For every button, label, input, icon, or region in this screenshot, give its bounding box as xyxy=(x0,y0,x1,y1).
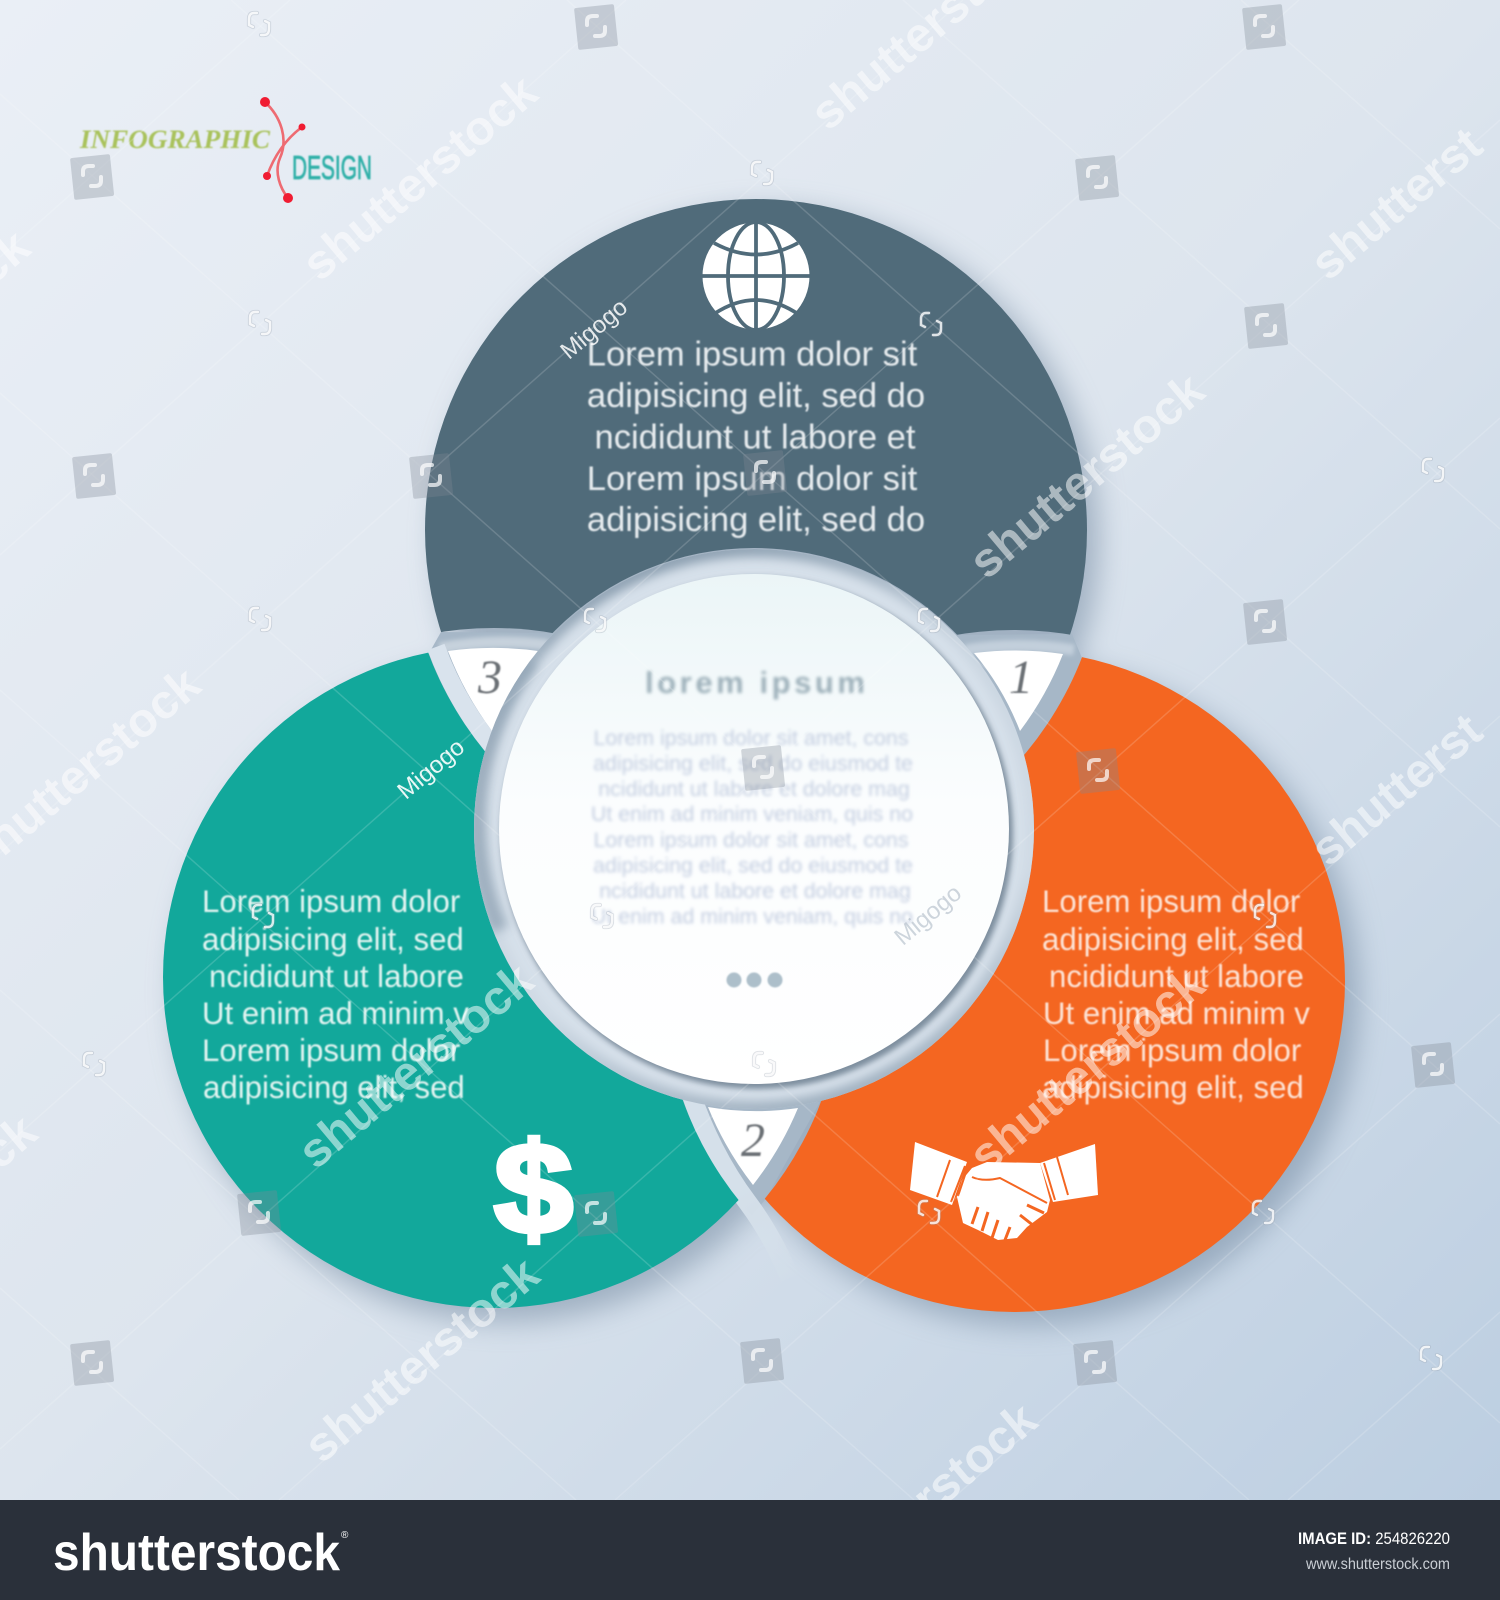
centre text block: Ut enim ad minim veniam, quis no xyxy=(591,904,913,928)
disc shadow xyxy=(501,577,1013,1089)
logo: infographic design xyxy=(79,97,372,203)
watermark author names: Migogo xyxy=(555,294,633,365)
panel: centre ring and disc xyxy=(474,549,1034,1109)
text block: left circle: adipisicing elit, sed xyxy=(202,922,464,957)
watermark text: shutterst xyxy=(1301,704,1492,876)
text block: top circle: Lorem ipsum dolor sit xyxy=(587,460,918,498)
panel: left teal circle xyxy=(163,652,738,1308)
text block: top circle: adipisicing elit, sed do xyxy=(587,377,925,415)
watermark text: shutterstock xyxy=(960,957,1215,1183)
label triangle 2 xyxy=(708,1107,798,1185)
text block: left circle: Lorem ipsum dolor xyxy=(202,884,460,919)
watermark text: rstock xyxy=(903,1393,1047,1526)
text block: top circle: Lorem ipsum dolor sit xyxy=(587,336,918,374)
text block: left circle: Ut enim ad minim v xyxy=(202,996,469,1031)
centre text block: adipisicing elit, sed do eiusmod te xyxy=(593,752,913,776)
label triangle 3 xyxy=(448,648,538,731)
light strip left of label 2 fading past the tip xyxy=(691,1094,790,1278)
image id: IMAGE ID: 254826220 xyxy=(1298,1529,1450,1548)
text block: top circle: adipisicing elit, sed do xyxy=(587,501,925,539)
number 2: 2 xyxy=(741,1114,765,1167)
centre text block: adipisicing elit, sed do eiusmod te xyxy=(593,854,913,878)
shaded band above label 1 xyxy=(965,646,1074,650)
text block: right circle: Lorem ipsum dolor xyxy=(1043,1033,1301,1068)
drop shadows of the three circles xyxy=(175,209,1359,1326)
centre text block xyxy=(591,726,913,928)
gaps between the circles xyxy=(428,632,1082,1215)
text block: left circle: adipisicing elit, sed xyxy=(203,1070,465,1105)
footer logo: shutterstock xyxy=(53,1524,340,1582)
text block: left circle xyxy=(202,884,469,1105)
light strip left of label 3 xyxy=(436,647,515,771)
centre text block: Ut enim ad minim veniam, quis no xyxy=(591,802,913,826)
text block: right circle xyxy=(1042,884,1310,1105)
icon: dollar sign: $ xyxy=(494,1116,573,1261)
text block: top circle: ncididunt ut labore et xyxy=(594,418,916,456)
centre white disc xyxy=(499,574,1009,1084)
icon: globe xyxy=(702,222,810,330)
logo word design: DESIGN xyxy=(292,149,372,186)
watermark text: shutterstock xyxy=(960,363,1215,589)
watermark text: shutterstock xyxy=(295,1247,550,1473)
watermark author names xyxy=(392,294,967,951)
centre heading: lorem ipsum xyxy=(645,665,865,700)
centre text block: ncididunt ut labore et dolore mag xyxy=(598,777,910,801)
centre ring xyxy=(474,549,1034,1109)
centre text block: Lorem ipsum dolor sit amet, cons xyxy=(593,828,909,852)
watermark text: shutterstock xyxy=(293,65,548,291)
text block: right circle: adipisicing elit, sed xyxy=(1042,922,1304,957)
website: www.shutterstock.com xyxy=(1305,1556,1450,1573)
footer banner xyxy=(0,1500,1500,1600)
panel: right orange circle xyxy=(764,657,1345,1312)
panel: top slate circle xyxy=(425,199,1087,635)
logo word infographic: INFOGRAPHIC xyxy=(79,125,271,154)
text block: right circle: Ut enim ad minim v xyxy=(1043,996,1310,1031)
text block: top circle xyxy=(587,336,925,539)
watermark text: shutterst xyxy=(1301,118,1492,290)
watermark author names: Migogo xyxy=(889,880,967,951)
text block: left circle: Lorem ipsum dolor xyxy=(202,1033,460,1068)
text block: right circle: Lorem ipsum dolor xyxy=(1042,884,1300,919)
text block: right circle: adipisicing elit, sed xyxy=(1042,1070,1304,1105)
number 1: 1 xyxy=(1009,651,1033,704)
watermark author names: Migogo xyxy=(392,734,470,805)
centre text block: Lorem ipsum dolor sit amet, cons xyxy=(593,726,909,750)
text block: left circle: ncididunt ut labore xyxy=(209,959,464,994)
logo red curves xyxy=(265,102,302,198)
icon: handshake xyxy=(910,1142,1098,1240)
label triangle 1 xyxy=(974,650,1063,731)
registered mark: ® xyxy=(341,1530,349,1541)
shaded band above label 3 xyxy=(440,642,548,648)
watermark marks xyxy=(70,4,1455,1386)
centre text block: ncididunt ut labore et dolore mag xyxy=(599,879,911,903)
three dots xyxy=(726,972,782,988)
watermark text: shutterstock xyxy=(289,953,544,1179)
number 3: 3 xyxy=(477,651,502,704)
text block: right circle: ncididunt ut labore xyxy=(1049,959,1304,994)
